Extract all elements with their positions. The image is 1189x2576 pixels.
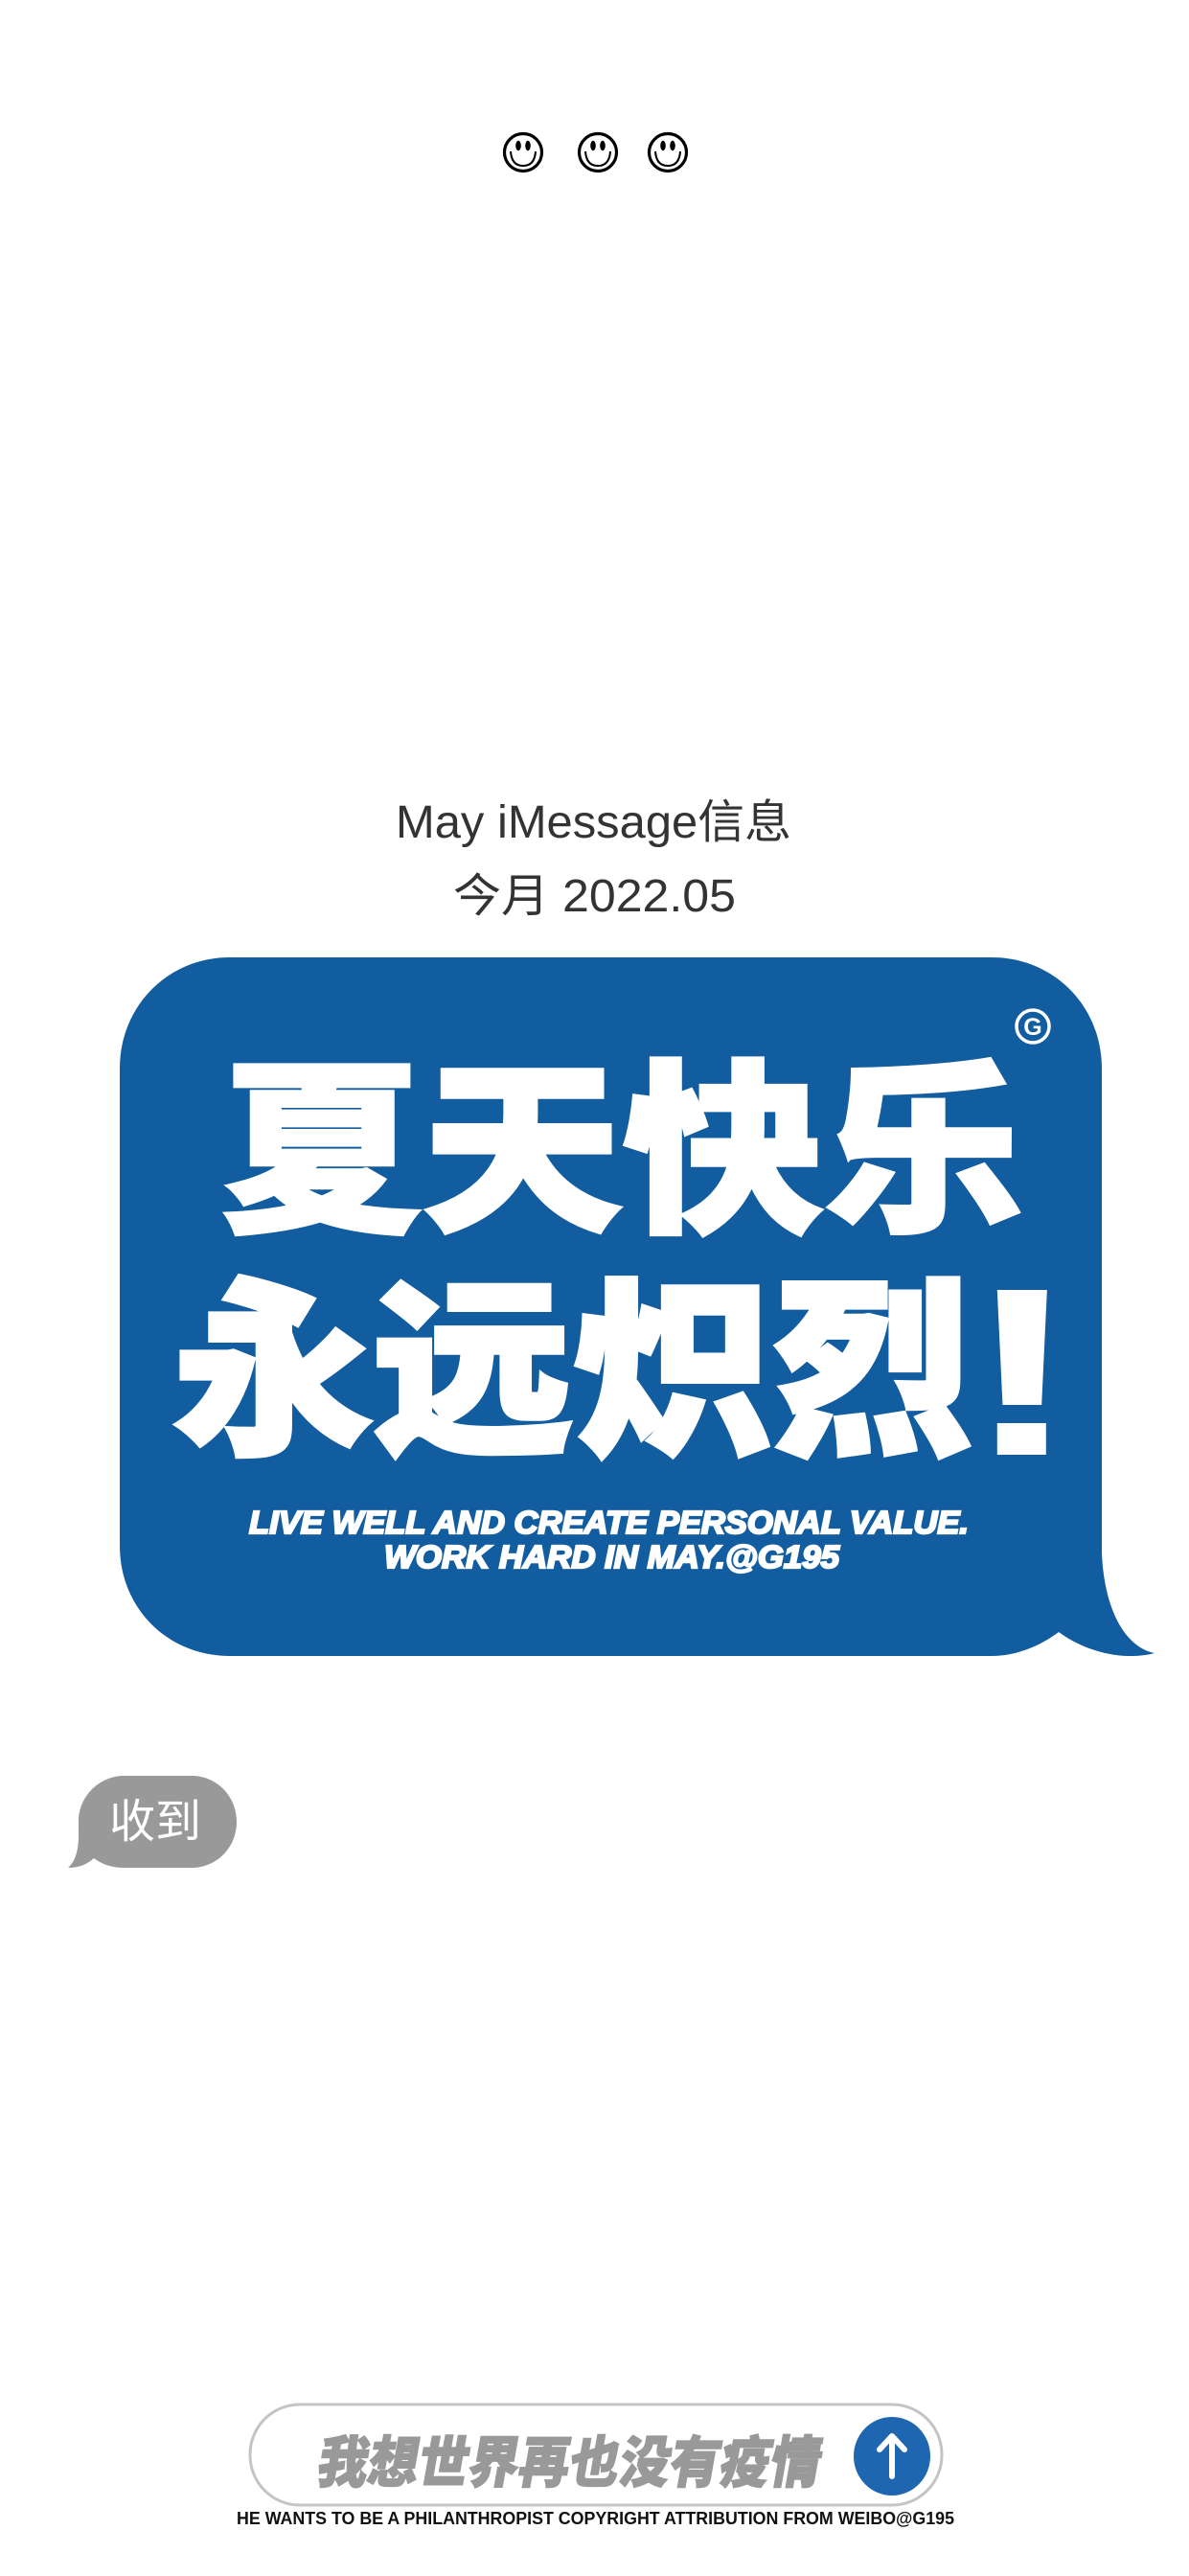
panel: input bar xyxy=(250,2404,942,2505)
tagline line 1: LIVE WELL AND CREATE PERSONAL VALUE. xyxy=(249,1505,969,1540)
footer credit: HE WANTS TO BE A PHILANTHROPIST COPYRIGHT ATTRIBUTION FROM WEIBO@G195 xyxy=(237,2509,954,2528)
big headline line 2: 永远炽烈 xyxy=(172,1267,972,1480)
bubble shape xyxy=(120,957,1155,1656)
icon: send arrow button xyxy=(854,2417,930,2496)
panel: grey reply bubble xyxy=(68,1776,237,1868)
icon: G logo: G xyxy=(1023,1014,1042,1041)
tagline line 2: WORK HARD IN MAY.@G195 xyxy=(384,1539,840,1575)
heading: May iMessage: May iMessage信息 xyxy=(396,797,791,848)
text: date: 今月 2022.05 xyxy=(453,871,736,922)
icon: three smileys xyxy=(504,134,686,171)
exclamation mark: ! xyxy=(965,1238,1080,1506)
big headline line 1: 夏天快乐 xyxy=(221,1049,1024,1257)
reply text: 收到 xyxy=(109,1797,201,1848)
icon: G logo xyxy=(1017,1010,1049,1043)
panel: blue speech bubble xyxy=(120,957,1155,1656)
input text: 我想世界再也没有疫情 xyxy=(313,2432,827,2495)
